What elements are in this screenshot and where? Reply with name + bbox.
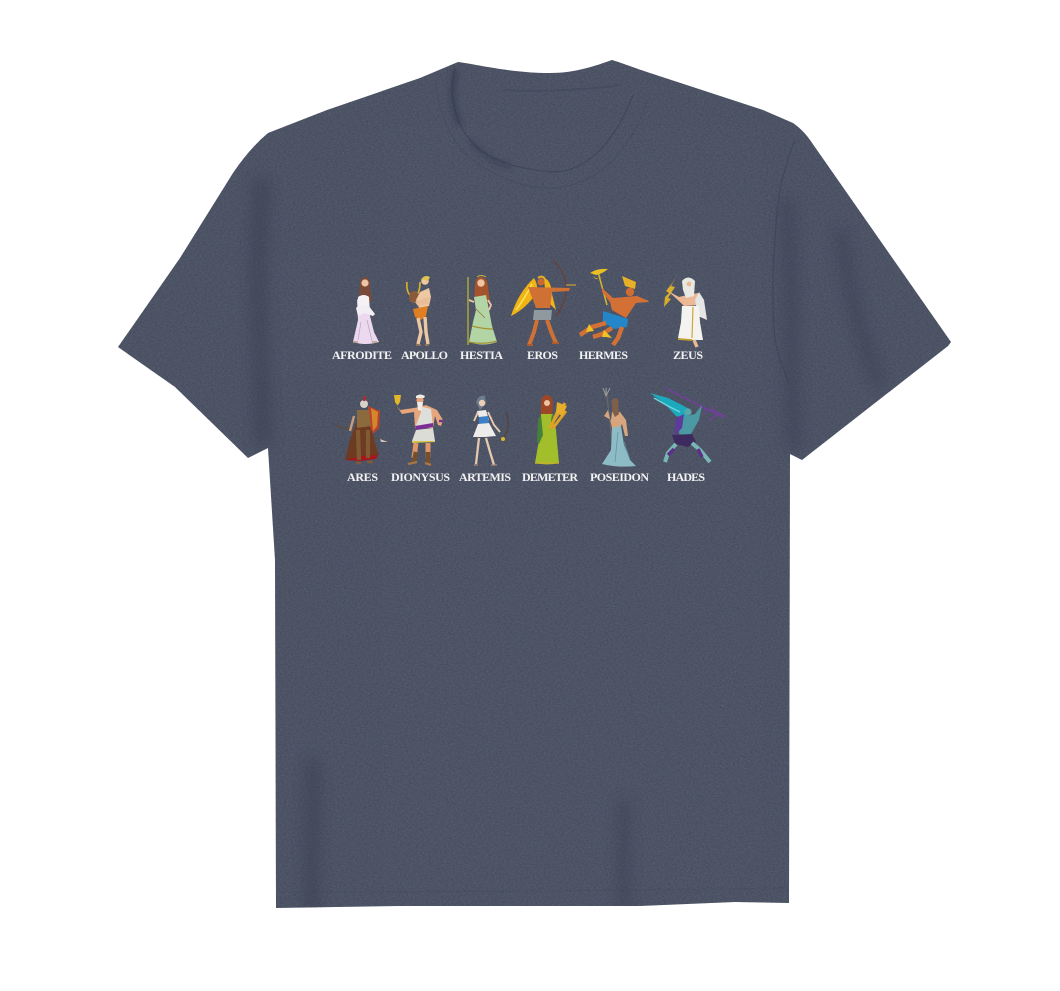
label: Poseidon: POSEIDON <box>590 470 649 484</box>
label: Apollo: APOLLO <box>401 348 448 362</box>
illustration: Afrodite <box>353 277 379 344</box>
illustration: Ares <box>335 396 388 463</box>
figure: Demeter <box>522 395 578 484</box>
illustration: Apollo <box>407 276 431 345</box>
figure: Dionysus <box>391 394 450 484</box>
label: Eros: EROS <box>527 348 558 362</box>
label: Zeus: ZEUS <box>673 348 703 362</box>
t-shirt <box>100 50 970 920</box>
label: Demeter: DEMETER <box>522 470 578 484</box>
illustration: Zeus <box>664 274 707 347</box>
printed design <box>332 260 725 484</box>
label: Ares: ARES <box>347 470 378 484</box>
illustration: Dionysus <box>394 394 443 465</box>
figure: Ares <box>335 396 388 484</box>
label: Hermes: HERMES <box>579 348 628 362</box>
illustration: Hestia <box>468 276 497 345</box>
illustration: Artemis <box>473 396 508 465</box>
figure: Apollo <box>401 276 448 362</box>
figure: Afrodite <box>332 277 392 362</box>
illustration: Poseidon <box>602 388 636 467</box>
neckline seams <box>278 68 795 892</box>
figure: Hades <box>650 388 725 484</box>
label: Hades: HADES <box>667 470 705 484</box>
label: Afrodite: AFRODITE <box>332 348 392 362</box>
label: Dionysus: DIONYSUS <box>391 470 450 484</box>
figure: Hermes <box>579 269 649 362</box>
label: Artemis: ARTEMIS <box>459 470 511 484</box>
illustration: Demeter <box>535 395 567 464</box>
illustration: Eros <box>511 260 576 345</box>
figure: Eros <box>511 260 576 362</box>
illustration: Hades <box>650 388 725 462</box>
figure: Artemis <box>459 396 511 484</box>
figure: Hestia <box>460 276 503 362</box>
figure: Poseidon <box>590 388 649 484</box>
figure: Zeus <box>664 274 707 362</box>
illustration: Hermes <box>580 269 649 345</box>
label: Hestia: HESTIA <box>460 348 503 362</box>
